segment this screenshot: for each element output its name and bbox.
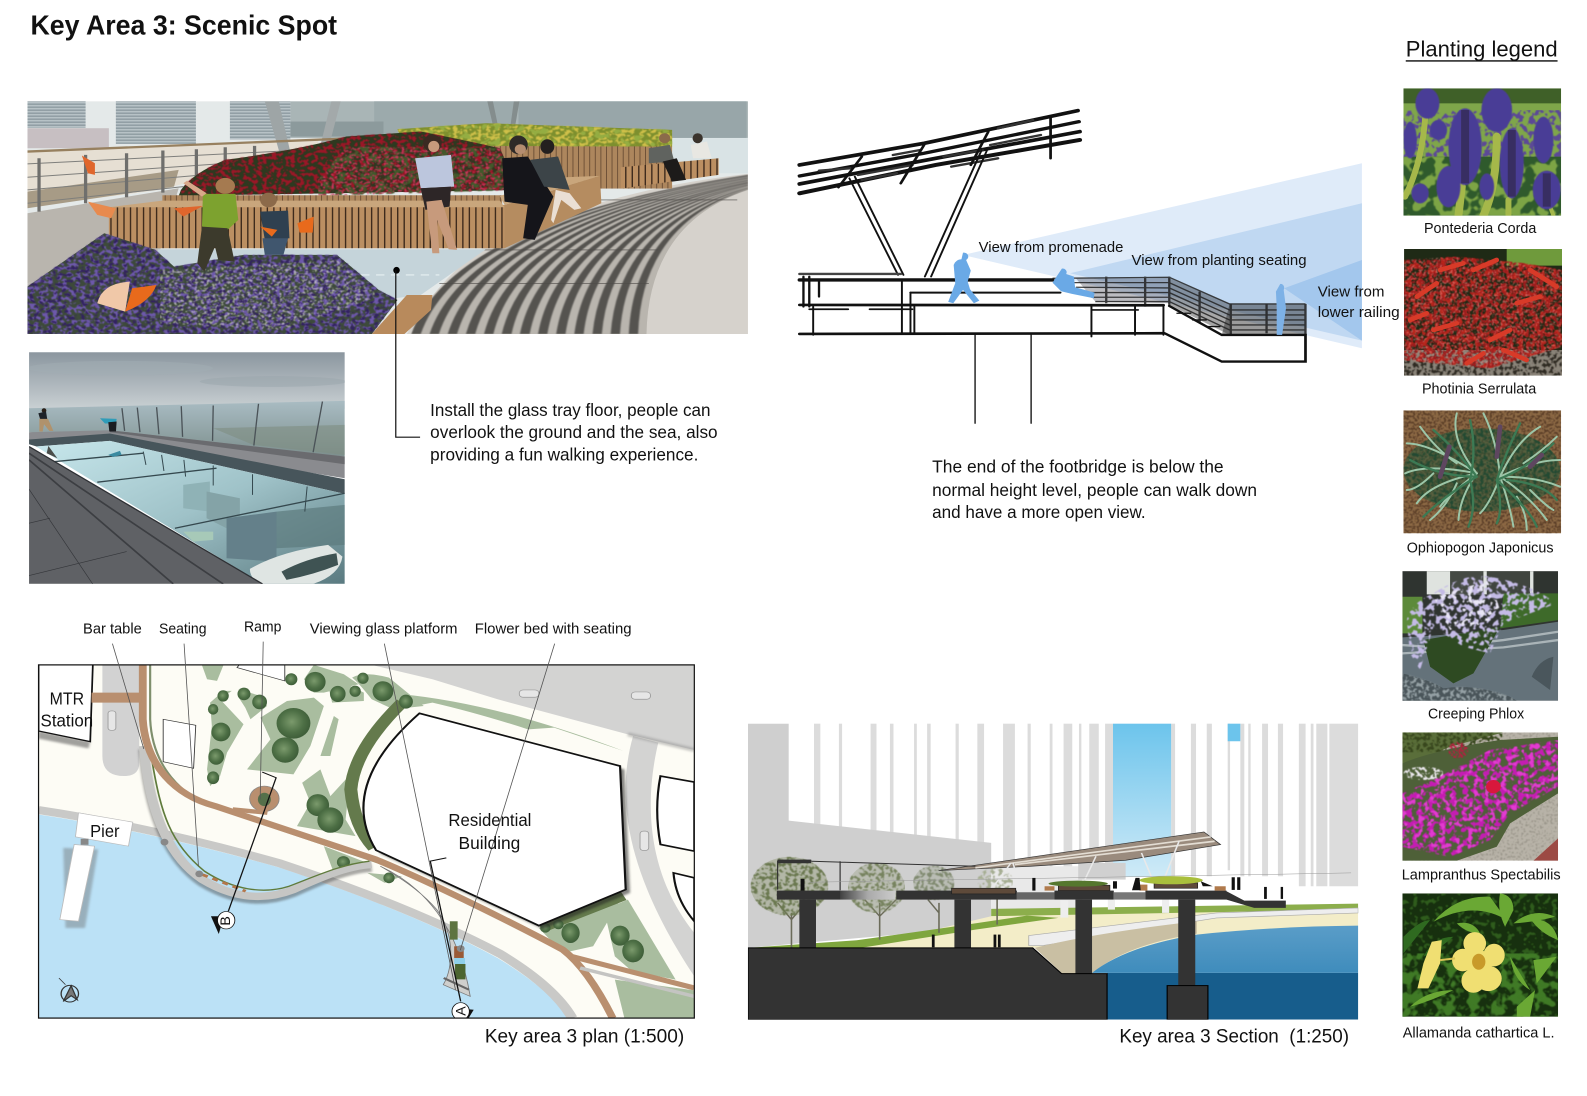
bridge deck, columns and section fill (748, 891, 1286, 1020)
canopy (778, 832, 1351, 890)
section caption: Key area 3 Section (1:250) (1119, 1026, 1349, 1047)
trees (207, 672, 644, 962)
glass floor panel (155, 249, 486, 328)
planters on deck (952, 876, 1226, 894)
text: plan place labels: Station (41, 711, 93, 731)
text: plan place labels: Pier (90, 821, 120, 841)
site plan (39, 666, 694, 1018)
leader line to glass tray note (396, 270, 420, 437)
photo: planted seating and glass floor render (27, 101, 748, 334)
text: plan callout labels: Flower bed with seating (475, 622, 632, 638)
butterflies (82, 156, 314, 312)
planting legend heading: Planting legend (1406, 37, 1558, 62)
sky gap (1113, 724, 1171, 877)
roads (102, 665, 694, 976)
blue figure: standing (1276, 284, 1286, 335)
hedge around residential building (351, 703, 624, 928)
section cut A (430, 858, 474, 1025)
blue figure: walking (948, 253, 979, 303)
children playing (183, 178, 289, 272)
brown promenade walkway (92, 665, 694, 1018)
pedestrians (801, 877, 1283, 947)
text: footbridge end note: The end of the footbridge is below the (932, 457, 1224, 477)
text: glass tray floor note: overlook the ground and the sea, also (430, 422, 718, 442)
text: sightline labels: View from (1318, 285, 1385, 301)
text: plan callout labels: Seating (159, 622, 207, 638)
section marker letters: A (454, 1006, 470, 1016)
legend label: Pontederia Corda: Pontederia Corda (1424, 221, 1537, 237)
viewing glass platform (380, 866, 470, 996)
text: plan callout labels (83, 619, 632, 638)
red flower bed (179, 132, 518, 196)
wooden planter (109, 176, 601, 248)
paved promenade with shadow stripes (407, 174, 748, 334)
text: glass tray floor note: Install the glass tray floor, people can (430, 400, 711, 420)
callout leaders above plan (112, 642, 555, 990)
garden lawn patches (202, 665, 694, 1018)
legend photo: Ophiopogon Japonicus (1403, 410, 1562, 534)
leader dot (393, 267, 400, 274)
north arrow (59, 978, 78, 1002)
legend label: Lampranthus Spectabilis: Lampranthus Spectabilis (1402, 867, 1561, 883)
text: plan callout labels: Viewing glass platform (310, 622, 458, 638)
railing sketch (1053, 277, 1305, 335)
text: footbridge end note: and have a more open view. (932, 502, 1146, 522)
legend photo: Pontederia Corda (1403, 88, 1562, 216)
ground and lawn (748, 900, 1358, 974)
text: sightline labels: lower railing (1318, 305, 1400, 321)
plan caption: Key area 3 plan (1:500) (485, 1026, 684, 1047)
pier (60, 813, 133, 928)
legend label: Photinia Serrulata: Photinia Serrulata (1422, 382, 1537, 398)
plan frame (39, 665, 694, 1018)
sightline cones (963, 163, 1362, 348)
legend photo: Lampranthus Spectabilis (1402, 732, 1558, 861)
text: plan place labels (41, 688, 531, 853)
back planter and bench (397, 123, 719, 189)
section marker letters (218, 916, 470, 1016)
text: glass tray floor note: providing a fun walking experience. (430, 444, 698, 464)
lavender flower border (27, 233, 397, 334)
text: plan callout labels: Ramp (244, 619, 281, 635)
paved deck foreground (29, 447, 263, 584)
trees (751, 857, 1013, 948)
water (39, 814, 569, 1018)
legend label: Ophiopogon Japonicus: Ophiopogon Japonicus (1407, 541, 1554, 557)
legend photo: Creeping Phlox (1402, 571, 1558, 701)
building footprints (39, 665, 694, 929)
text: glass tray floor note (430, 400, 718, 464)
canopy sketch (800, 111, 1080, 277)
section drawing (748, 724, 1358, 1020)
legend photo: Photinia Serrulata (1404, 249, 1562, 376)
section cut B (211, 772, 276, 934)
people seated on planter (415, 133, 712, 253)
text: plan place labels: Residential (448, 810, 531, 830)
text: footbridge end note (932, 457, 1257, 522)
background towers (814, 724, 1358, 886)
cars (108, 690, 650, 850)
blue figure: seated (1053, 269, 1095, 298)
text: sightline labels (979, 240, 1400, 321)
text: sightline labels: View from promenade (979, 240, 1123, 256)
legend photo: Allamanda cathartica L. (1402, 893, 1558, 1017)
text: plan place labels: Building (459, 833, 520, 853)
yellow flowers (1417, 932, 1505, 993)
two workers on deck (38, 408, 122, 458)
grey mid-rise block (748, 724, 991, 948)
text: plan callout labels: Bar table (83, 622, 142, 638)
deck and column lines (800, 274, 1305, 423)
text: plan place labels: MTR (50, 688, 84, 708)
photo: glass floor viewing deck (29, 352, 345, 584)
legend label: Allamanda cathartica L.: Allamanda cathartica L. (1403, 1025, 1555, 1041)
footbridge seating walkway (144, 746, 372, 900)
section marker letters: B (218, 916, 234, 926)
diagram: sightline sketch section (797, 108, 1362, 424)
water (1092, 926, 1358, 1020)
text: footbridge end note: normal height level, people can walk down (932, 480, 1257, 500)
title: Key Area 3: Scenic Spot (30, 9, 337, 40)
glass floor reflections (36, 441, 345, 584)
legend label: Creeping Phlox: Creeping Phlox (1428, 707, 1525, 723)
text: sightline labels: View from planting seating (1132, 253, 1307, 269)
